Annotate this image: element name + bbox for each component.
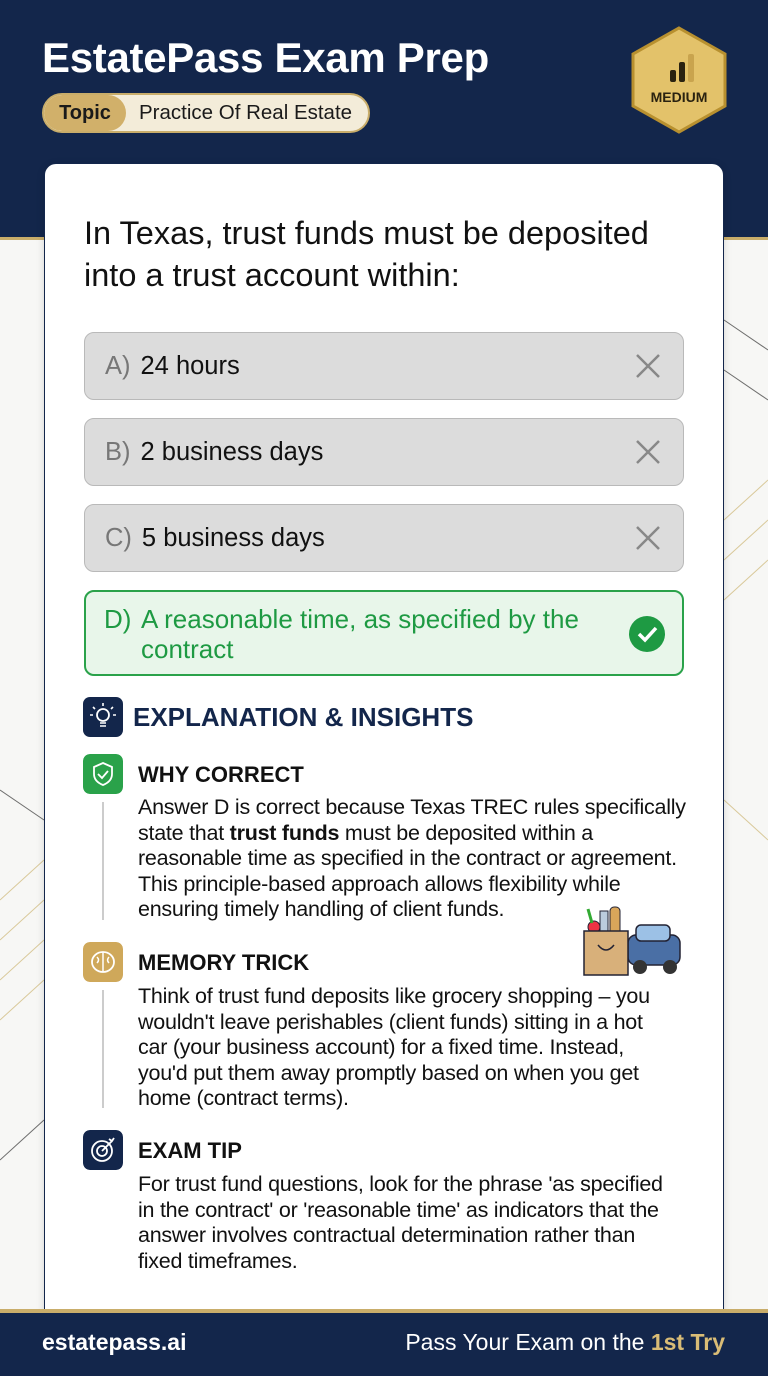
topic pill: Topic xyxy=(59,102,111,124)
exam tip text: answer involves contractual determination rather than xyxy=(138,1223,635,1247)
exam tip text: For trust fund questions, look for the phrase 'as specified xyxy=(138,1172,663,1196)
why correct text xyxy=(138,795,686,921)
illustration: grocery bag and car xyxy=(583,906,681,976)
why correct text: This principle-based approach allows flexibility while xyxy=(138,872,620,896)
badge: medium: MEDIUM xyxy=(651,89,707,105)
memory trick text: car (your business account) for a fixed time. Instead, xyxy=(138,1035,624,1059)
option B: 2 business days xyxy=(140,438,323,466)
memory trick heading: MEMORY TRICK xyxy=(138,950,309,975)
why correct text: Answer D is correct because Texas TREC rules specifically xyxy=(138,795,686,819)
why correct heading: WHY CORRECT xyxy=(138,762,304,787)
option A: A) xyxy=(105,352,130,380)
icon: target xyxy=(83,1130,123,1170)
option D correct: D) xyxy=(104,604,131,634)
exam tip text: in the contract' or 'reasonable time' as indicators that the xyxy=(138,1198,659,1222)
option D correct xyxy=(84,590,684,676)
main card xyxy=(44,163,724,1323)
option C: C) xyxy=(105,524,132,552)
question: into a trust account within: xyxy=(84,257,460,293)
topic pill xyxy=(42,93,370,133)
exam tip heading: EXAM TIP xyxy=(138,1138,242,1163)
why correct text: state that trust funds must be deposited within a xyxy=(138,820,593,844)
option B: B) xyxy=(105,438,130,466)
option A xyxy=(84,332,684,400)
option C xyxy=(84,504,684,572)
explanation heading xyxy=(83,697,473,737)
exam tip text xyxy=(138,1172,663,1272)
footer: Pass Your Exam on the 1st Try xyxy=(405,1329,725,1355)
explanation heading: EXPLANATION & INSIGHTS xyxy=(133,702,473,732)
footer xyxy=(0,1309,768,1376)
title: EstatePass Exam Prep xyxy=(42,34,489,81)
question: In Texas, trust funds must be deposited xyxy=(84,215,649,251)
option D correct: contract xyxy=(141,634,234,664)
why correct text: ensuring timely handling of client funds. xyxy=(138,897,504,921)
question xyxy=(84,215,649,293)
option A: 24 hours xyxy=(140,352,240,380)
memory trick text: wouldn't leave perishables (client funds) sitting in a hot xyxy=(138,1010,643,1034)
option B xyxy=(84,418,684,486)
header xyxy=(0,0,768,240)
icon: check xyxy=(629,616,665,652)
memory trick text: you'd put them away promptly based on when you get xyxy=(138,1060,639,1084)
memory trick text: home (contract terms). xyxy=(138,1086,349,1110)
exam tip text: fixed timeframes. xyxy=(138,1248,297,1272)
badge: medium xyxy=(632,26,726,134)
memory trick text: Think of trust fund deposits like grocery shopping – you xyxy=(138,984,650,1008)
icon: bulb xyxy=(83,697,123,737)
option D correct: A reasonable time, as specified by the xyxy=(141,604,579,634)
icon: brain xyxy=(83,942,123,982)
option C: 5 business days xyxy=(142,524,325,552)
why correct text: reasonable time as specified in the contract or agreement. xyxy=(138,846,677,870)
icon: shield xyxy=(83,754,123,794)
topic pill: Practice Of Real Estate xyxy=(139,101,352,124)
memory trick text xyxy=(138,984,650,1110)
footer: estatepass.ai xyxy=(42,1329,186,1355)
